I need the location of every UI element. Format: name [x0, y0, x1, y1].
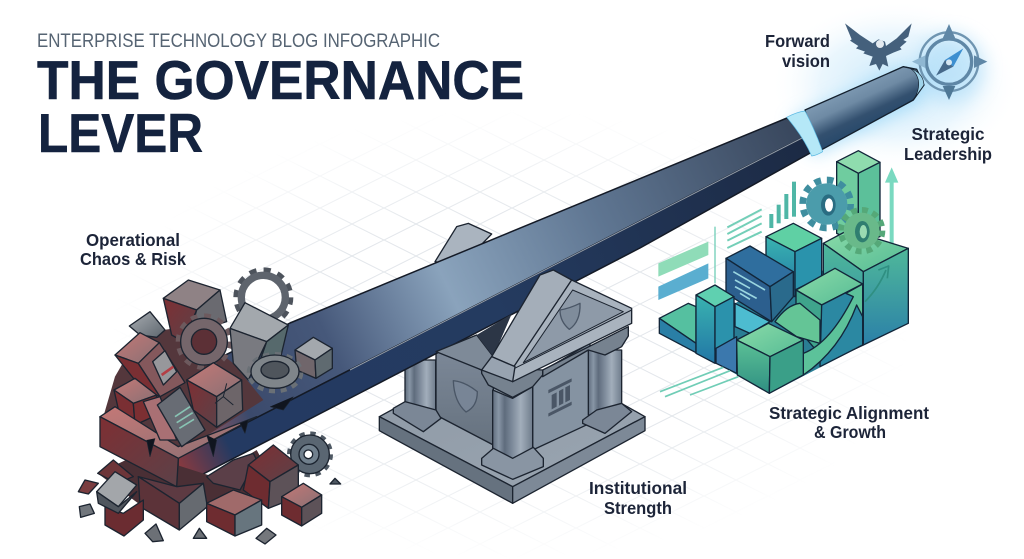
gear: green	[841, 210, 882, 251]
debris pieces	[78, 478, 341, 544]
label: institutional strength: Strength	[604, 498, 672, 518]
curved ramp	[775, 303, 820, 343]
label: institutional strength: Institutional	[589, 478, 687, 498]
teal block	[766, 223, 822, 297]
small right cube	[282, 483, 322, 526]
cracks	[147, 397, 293, 457]
handle grip	[805, 67, 924, 153]
pile backing	[103, 327, 263, 453]
pile of chaos and risk	[78, 271, 341, 544]
gear: blue	[803, 180, 851, 228]
glow behind lever handle	[770, 0, 1020, 170]
small red-grey cube	[295, 337, 332, 378]
label: operational chaos and risk	[80, 230, 186, 269]
book	[157, 387, 205, 447]
pediment slope	[492, 270, 572, 367]
big curved arrow	[803, 284, 863, 375]
small red cube	[114, 378, 157, 425]
institution lower body	[379, 343, 645, 503]
left low block	[659, 303, 696, 353]
back-left column	[393, 360, 441, 432]
tall green block	[837, 151, 880, 243]
cyan floor	[735, 303, 770, 333]
growth blocks chart	[658, 151, 908, 397]
right wall with emblem	[533, 343, 590, 450]
label: strategic alignment and growth: Strategic Alignment	[769, 403, 929, 423]
icon: institution back gable	[435, 223, 492, 267]
box with panel	[115, 333, 185, 397]
lever side face	[178, 135, 812, 487]
lever handle	[787, 67, 924, 156]
left wall with shield	[436, 345, 493, 445]
lever beam	[100, 118, 812, 487]
lower rubble backing	[98, 450, 277, 530]
top maroon cube	[163, 280, 227, 342]
floating green panel	[658, 242, 708, 277]
left cornice	[482, 357, 515, 382]
tall teal column	[696, 285, 734, 363]
label: operational chaos and risk: Operational	[86, 230, 180, 250]
green middle block	[796, 268, 863, 367]
dark rubble	[207, 453, 257, 490]
slab front	[100, 407, 257, 458]
grey tilted cube	[97, 472, 137, 513]
gear: rust	[178, 316, 230, 367]
back roof stone	[436, 335, 493, 370]
cracked red cube	[187, 363, 243, 427]
label: strategic leadership: Strategic	[912, 124, 985, 144]
pediment face with shield	[513, 280, 632, 382]
label: forward vision: Forward	[765, 31, 830, 51]
label: strategic alignment and growth: & Growth	[814, 422, 886, 442]
large right block	[823, 230, 908, 363]
lever top face	[100, 118, 808, 458]
label: forward vision: vision	[782, 51, 830, 71]
icon: eagle	[845, 23, 912, 71]
front green block	[737, 323, 803, 393]
label: operational chaos and risk: Chaos & Risk	[80, 249, 186, 269]
growth arrow upward	[885, 167, 898, 247]
label: strategic leadership	[904, 124, 992, 164]
stone plinth	[379, 380, 645, 503]
red lower left cube	[105, 500, 143, 536]
small blue tile	[716, 337, 737, 373]
right column	[583, 350, 632, 433]
gear: flat grey	[249, 354, 301, 391]
thin chart arrow	[865, 266, 889, 302]
data lines	[660, 367, 738, 397]
lower slab	[138, 477, 207, 530]
slab left face	[100, 417, 178, 487]
entablature	[543, 327, 628, 377]
background isometric grid	[166, 140, 852, 528]
handle end cap	[903, 67, 924, 100]
shadow under lever	[477, 314, 512, 357]
title block	[37, 31, 524, 164]
right red cube	[243, 445, 298, 508]
red sheet	[143, 397, 177, 440]
floating list lines	[715, 209, 762, 283]
eyebrow: ENTERPRISE TECHNOLOGY BLOG INFOGRAPHIC	[37, 31, 440, 52]
label: institutional strength	[589, 478, 687, 518]
label: strategic leadership: Leadership	[904, 144, 992, 164]
heading line 2: LEVER	[38, 102, 203, 164]
handle glow ring	[787, 111, 823, 156]
label: strategic alignment and growth	[769, 403, 929, 442]
lever highlight edge	[350, 135, 808, 370]
gear: dark lower	[289, 434, 331, 475]
front column	[482, 387, 543, 479]
gear: back ring	[237, 271, 290, 324]
institution roof	[436, 270, 632, 397]
icon: compass	[912, 24, 987, 100]
dark red back chunk	[98, 460, 133, 483]
dark blue panel	[726, 246, 793, 322]
broken front cube	[207, 490, 262, 536]
front capital	[482, 368, 543, 397]
floating blue panel	[658, 263, 708, 300]
floating bar chart	[769, 182, 796, 228]
large grey block	[230, 303, 288, 380]
chart backing	[717, 270, 908, 393]
label: forward vision	[765, 31, 830, 71]
heading line 1: THE GOVERNANCE	[37, 49, 524, 111]
small grey rock	[129, 312, 165, 337]
